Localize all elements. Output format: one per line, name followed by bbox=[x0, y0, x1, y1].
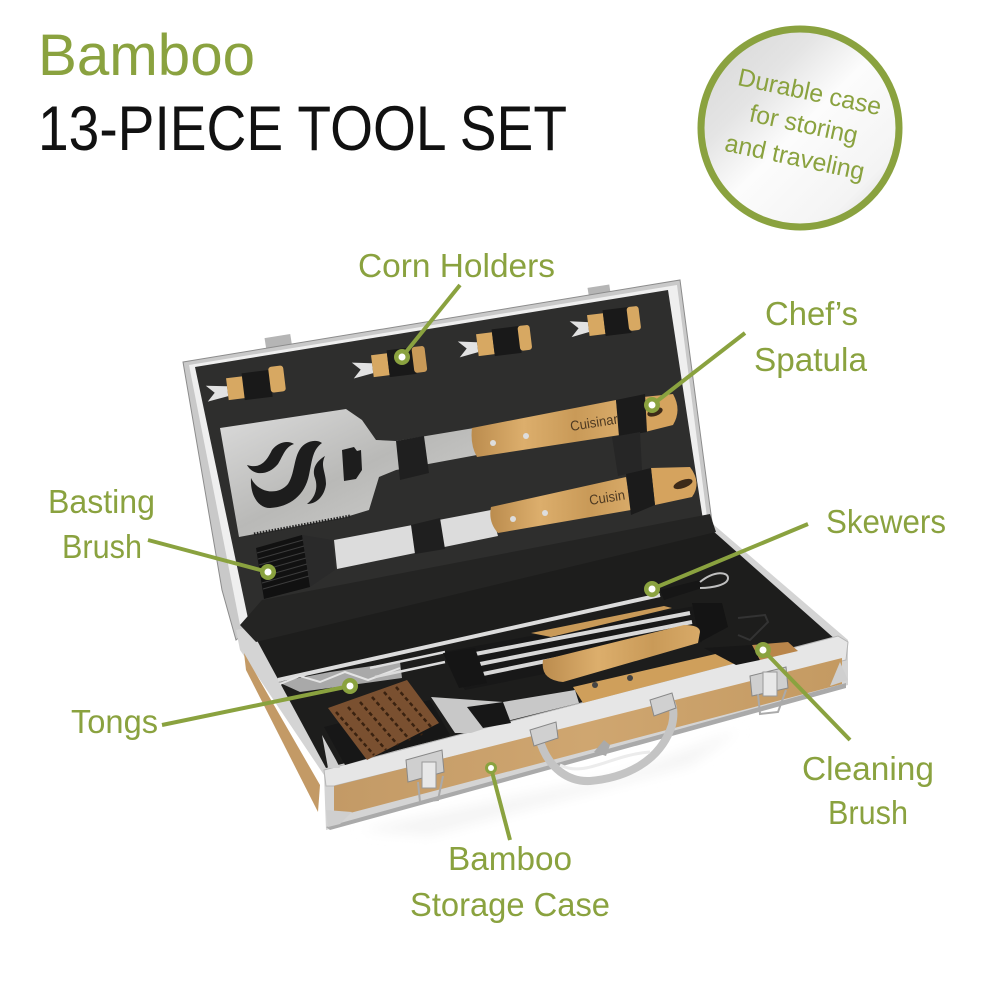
label: bamboo storage case bbox=[410, 762, 610, 923]
title: Bamboo bbox=[38, 23, 255, 88]
label: bamboo storage case: Bamboo bbox=[448, 840, 572, 877]
callout badge: durable case: for storing bbox=[747, 100, 860, 150]
label: corn holders bbox=[358, 247, 555, 365]
label: cleaning brush: Brush bbox=[828, 794, 908, 831]
label: cleaning brush bbox=[755, 642, 934, 831]
callout badge: durable case: and traveling bbox=[722, 129, 867, 186]
label: corn holders: Corn Holders bbox=[358, 247, 555, 284]
callout badge: durable case: Durable case bbox=[735, 63, 884, 121]
chef's spatula: Cuisinar bbox=[569, 411, 619, 434]
cleaning brush bbox=[322, 642, 798, 768]
title: 13-PIECE TOOL SET bbox=[38, 94, 567, 164]
case base bbox=[236, 514, 848, 830]
handle and latches bbox=[406, 667, 788, 802]
basting brush bbox=[256, 467, 697, 599]
tool case photo bbox=[183, 280, 848, 835]
skewers bbox=[278, 573, 728, 680]
label: basting brush: Basting bbox=[48, 483, 155, 520]
label: chef's spatula: Chef’s bbox=[765, 295, 858, 332]
label: skewers bbox=[644, 503, 946, 597]
label: chef's spatula: Spatula bbox=[754, 341, 868, 378]
label: bamboo storage case: Storage Case bbox=[410, 886, 610, 923]
callout badge: durable case bbox=[701, 29, 899, 227]
corn holders bbox=[204, 306, 641, 405]
basting brush: Cuisin bbox=[588, 487, 626, 508]
chef's spatula bbox=[220, 394, 678, 537]
tongs bbox=[278, 603, 768, 692]
label: chef's spatula bbox=[644, 295, 868, 413]
label: basting brush: Brush bbox=[62, 528, 142, 565]
label: basting brush bbox=[48, 483, 276, 580]
label: cleaning brush: Cleaning bbox=[802, 750, 934, 787]
label: tongs bbox=[71, 678, 358, 740]
label: skewers: Skewers bbox=[826, 503, 946, 540]
title bbox=[38, 23, 567, 164]
label: tongs: Tongs bbox=[71, 703, 158, 740]
case lid bbox=[183, 280, 714, 640]
floor shadow bbox=[360, 730, 740, 835]
